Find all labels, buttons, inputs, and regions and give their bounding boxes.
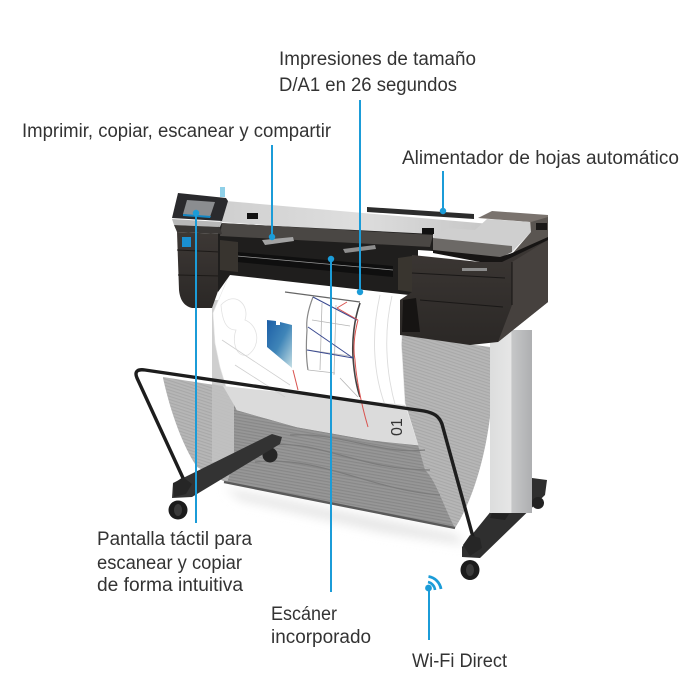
label: pantalla: escanear y copiar	[97, 553, 243, 574]
blue label	[182, 237, 191, 247]
top lid	[220, 201, 490, 240]
blue floor plan	[267, 320, 292, 368]
product badge	[462, 268, 487, 271]
label: escaner: incorporado	[271, 627, 371, 648]
label: imprimir: Imprimir, copiar, escanear y compartir	[22, 121, 332, 142]
floor shadow	[225, 488, 465, 545]
callout line: alimentador	[440, 171, 446, 214]
label: alimentador: Alimentador de hojas automático	[402, 148, 679, 169]
callout line: escaner	[328, 256, 334, 592]
document box at the back	[478, 211, 548, 237]
label: pantalla: de forma intuitiva	[97, 575, 243, 596]
stand: left leg	[212, 300, 234, 463]
sheet guides	[262, 237, 294, 245]
callout line: impresiones	[357, 100, 363, 295]
callout line: imprimir	[269, 145, 275, 240]
scanner deck	[218, 223, 433, 296]
stand: right foot and leg	[460, 330, 547, 580]
basket: mesh	[163, 335, 490, 528]
label: escaner: Escáner	[271, 604, 338, 625]
blueprint drawing	[221, 292, 396, 427]
label: wi-fi: Wi-Fi Direct	[412, 651, 508, 672]
label: impresiones	[279, 49, 476, 96]
label: escaner	[271, 604, 371, 648]
touch screen panel	[172, 187, 228, 234]
label: impresiones: D/A1 en 26 segundos	[279, 75, 457, 96]
basket: frame	[136, 370, 473, 537]
label: pantalla	[97, 529, 252, 596]
sheet number: 01	[389, 418, 406, 436]
top cover	[433, 219, 531, 257]
paper sheet	[213, 273, 418, 445]
automatic sheet feeder	[367, 207, 474, 219]
caster brackets	[173, 477, 482, 556]
printer	[177, 201, 548, 345]
icon: wi-fi with callout line	[425, 576, 441, 640]
right housing	[400, 238, 548, 345]
clips	[247, 213, 258, 219]
left body	[177, 232, 222, 308]
stand: left foot	[168, 434, 282, 520]
callout line: pantalla	[193, 210, 199, 523]
label: pantalla: Pantalla táctil para	[97, 529, 252, 550]
label: impresiones: Impresiones de tamaño	[279, 49, 476, 70]
